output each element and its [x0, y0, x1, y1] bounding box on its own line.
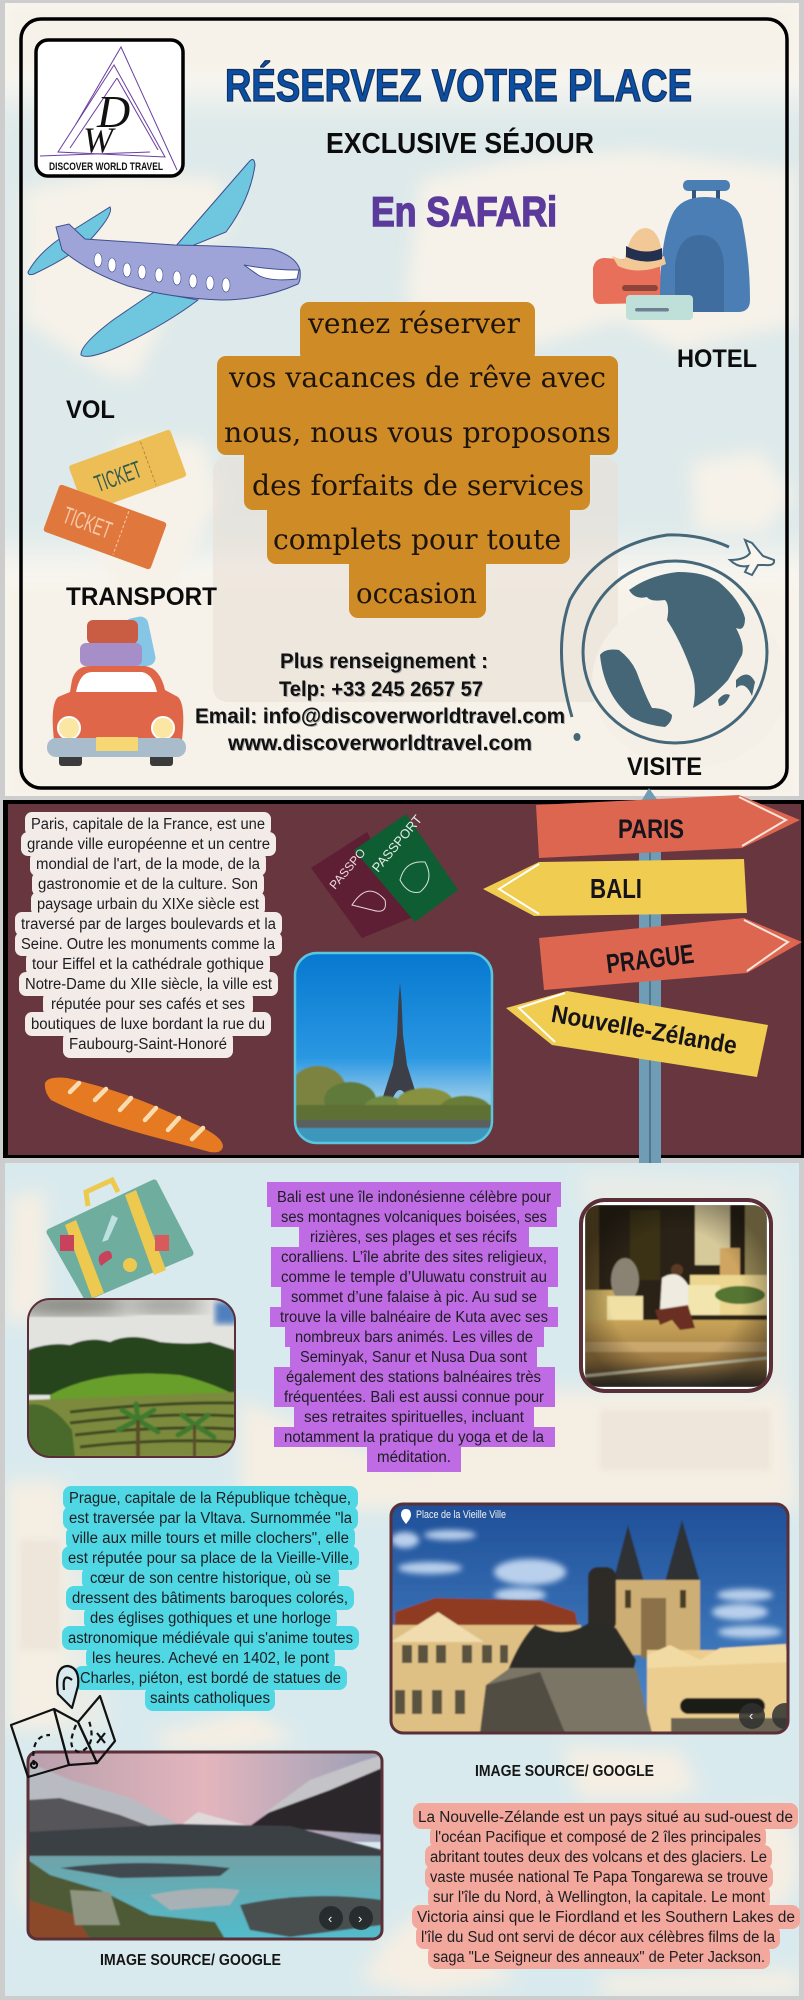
text block: Paris: Paris, capitale de la France, est une: [31, 816, 265, 833]
text block: Bali: notamment la pratique du yoga et de la: [284, 1429, 544, 1446]
icon: tickets: [43, 429, 187, 570]
icon: suitcase: [50, 1180, 190, 1298]
icon: car with luggage: [47, 615, 186, 766]
photo: Prague Old Town Square: [391, 1504, 798, 1733]
label: transport: TRANSPORT: [66, 583, 217, 611]
title: RÉSERVEZ VOTRE PLACE: [225, 60, 692, 111]
text block: Bali: sommet d’une falaise à pic. Au sud se: [291, 1289, 537, 1306]
text block: Paris: [15, 812, 282, 1058]
photo: Bali street: [575, 1195, 777, 1397]
sign: Paris: [536, 795, 800, 858]
callout: booking message: venez réserver: [307, 307, 521, 340]
panel: Paris: [3, 788, 804, 1177]
text block: contact details: Plus renseignement :: [280, 650, 488, 673]
sign: Prague: [539, 918, 802, 990]
sign: Paris: PARIS: [618, 814, 684, 844]
panel: destinations: [5, 1163, 800, 1996]
logo: W: [83, 120, 116, 160]
text block: New Zealand: Victoria ainsi que le Fiordland et les Southern Lakes de: [417, 1909, 795, 1926]
text block: contact details: Email: info@discoverworldtravel.com: [195, 705, 565, 728]
text block: Prague: Prague, capitale de la République tchèque,: [69, 1490, 351, 1507]
text block: Prague: astronomique médiévale qui s'anime toutes: [68, 1630, 353, 1647]
heading: safari: En SAFARi: [371, 188, 557, 235]
caption: image source left: IMAGE SOURCE/ GOOGLE: [100, 1952, 281, 1969]
sign: Nouvelle-Zélande: [506, 991, 768, 1077]
icon: airplane: [28, 159, 300, 356]
photo: Prague Old Town Square: Place de la Vieille Ville: [416, 1509, 506, 1521]
text block: Bali: comme le temple d’Uluwatu construit au: [281, 1269, 547, 1286]
icon: globe: [561, 535, 774, 743]
text block: Prague: [62, 1486, 359, 1711]
photo: Eiffel Tower: [290, 953, 492, 1143]
callout: booking message: des forfaits de services: [252, 469, 584, 502]
text block: New Zealand: abritant toutes deux des volcans et des glaciers. Le: [430, 1849, 767, 1866]
callout: booking message: occasion: [356, 577, 477, 610]
callout: booking message: [217, 302, 618, 618]
text block: Bali: nombreux bars animés. Les villes de: [295, 1329, 533, 1346]
text block: Paris: Faubourg-Saint-Honoré: [69, 1036, 227, 1053]
photo: rice terraces: [10, 1295, 237, 1457]
text block: Prague: les heures. Achevé en 1402, le pont: [92, 1650, 330, 1667]
sign: Bali: [483, 859, 747, 916]
text block: New Zealand: sur l'île du Nord, à Wellington, la capitale. Le mont: [433, 1889, 766, 1906]
icon: tickets: TICKET: [91, 456, 146, 498]
subtitle: EXCLUSIVE SÉJOUR: [326, 126, 594, 160]
icon: baguette: [45, 1078, 223, 1152]
label: visite: VISITE: [627, 753, 702, 781]
photo: Prague Old Town Square: ‹: [749, 1708, 753, 1723]
icon: passports: PASSPO: [327, 846, 368, 892]
text block: Bali: Seminyak, Sanur et Nusa Dua sont: [300, 1349, 528, 1366]
text block: Bali: [267, 1182, 561, 1472]
text block: Prague: saints catholiques: [150, 1690, 270, 1707]
icon: passports: PASSPORT: [369, 812, 425, 875]
callout: booking message: vos vacances de rêve avec: [228, 361, 606, 394]
logo: D: [96, 86, 130, 137]
text block: Bali: méditation.: [377, 1449, 451, 1466]
text block: Paris: paysage urbain du XIXe siècle est: [37, 896, 260, 913]
text block: contact details: www.discoverworldtravel.com: [227, 732, 532, 755]
text block: Paris: Notre-Dame du XIIe siècle, la ville est: [25, 976, 273, 993]
text block: contact details: Telp: +33 245 2657 57: [279, 678, 483, 701]
text block: contact details: [195, 650, 565, 755]
text block: Paris: tour Eiffel et la cathédrale gothique: [32, 956, 264, 973]
text block: Bali: trouve la ville balnéaire de Kuta avec ses: [280, 1309, 548, 1326]
text block: Paris: mondial de l'art, de la mode, de la: [36, 856, 260, 873]
icon: luggage: [593, 180, 750, 320]
text block: Paris: réputée pour ses cafés et ses: [51, 996, 245, 1013]
icon: passports: [311, 812, 458, 938]
text block: Prague: est traversée par la Vltava. Surnommée "la: [69, 1510, 352, 1527]
sign: Nouvelle-Zélande: Nouvelle-Zélande: [549, 1000, 739, 1060]
callout: booking message: nous, nous vous proposons: [224, 416, 611, 449]
text block: Bali: rizières, ses plages et ses récifs: [310, 1229, 517, 1246]
text block: Prague: ville aux mille tours et mille clochers", elle: [72, 1530, 349, 1547]
caption: image source right: IMAGE SOURCE/ GOOGLE: [475, 1763, 654, 1780]
text block: New Zealand: [412, 1803, 800, 1969]
text block: New Zealand: vaste musée national Te Papa Tongarewa se trouve: [430, 1869, 768, 1886]
icon: folded map with pin: [11, 1666, 115, 1777]
text block: Bali: également des stations balnéaires très: [286, 1369, 541, 1386]
logo: DISCOVER WORLD TRAVEL: [49, 161, 163, 173]
text block: Prague: des églises gothiques et une horloge: [90, 1610, 331, 1627]
photo: New Zealand lake: ‹: [328, 1911, 332, 1926]
text block: New Zealand: l'océan Pacifique et composé de 2 îles principales: [435, 1829, 761, 1846]
text block: Bali: coralliens. L’île abrite des sites religieux,: [281, 1249, 547, 1266]
text block: Paris: grande ville européenne et un centre: [27, 836, 270, 853]
text block: Bali: ses montagnes volcaniques boisées, ses: [281, 1209, 547, 1226]
text block: Bali: ses retraites spirituelles, incluant: [304, 1409, 525, 1426]
sign: Bali: BALI: [590, 873, 642, 904]
text block: Paris: traversé par de larges boulevards et la: [21, 916, 276, 933]
text block: Paris: gastronomie et de la culture. Son: [38, 876, 258, 893]
text block: New Zealand: l'île du Sud ont servi de décor aux célèbres films de la: [421, 1929, 775, 1946]
label: hotel: HOTEL: [677, 345, 757, 373]
sign: Prague: PRAGUE: [605, 939, 696, 979]
panel: hero booking: [0, 3, 804, 800]
text block: Paris: boutiques de luxe bordant la rue du: [31, 1016, 265, 1033]
text block: Paris: Seine. Outre les monuments comme la: [21, 936, 275, 953]
callout: booking message: complets pour toute: [273, 523, 561, 556]
signpost: [483, 788, 802, 1177]
logo: [36, 40, 183, 176]
text block: Prague: dressent des bâtiments baroques colorés,: [72, 1590, 348, 1607]
text block: Prague: Charles, piéton, est bordé de statues de: [80, 1670, 341, 1687]
text block: Bali: fréquentées. Bali est aussi connue pour: [284, 1389, 544, 1406]
text block: Prague: est réputée pour sa place de la Vieille-Ville,: [68, 1550, 353, 1567]
text block: Bali: Bali est une île indonésienne célèbre pour: [277, 1189, 551, 1206]
photo: New Zealand lake: [28, 1752, 382, 1939]
text block: Prague: cœur de son centre historique, où se: [90, 1570, 331, 1587]
text block: New Zealand: saga "Le Seigneur des anneaux" de Peter Jackson.: [433, 1949, 765, 1966]
label: vol: VOL: [66, 396, 115, 424]
photo: New Zealand lake: ›: [358, 1911, 362, 1926]
icon: tickets: TICKET: [59, 502, 116, 544]
text block: New Zealand: La Nouvelle-Zélande est un pays situé au sud-ouest de: [418, 1809, 793, 1826]
